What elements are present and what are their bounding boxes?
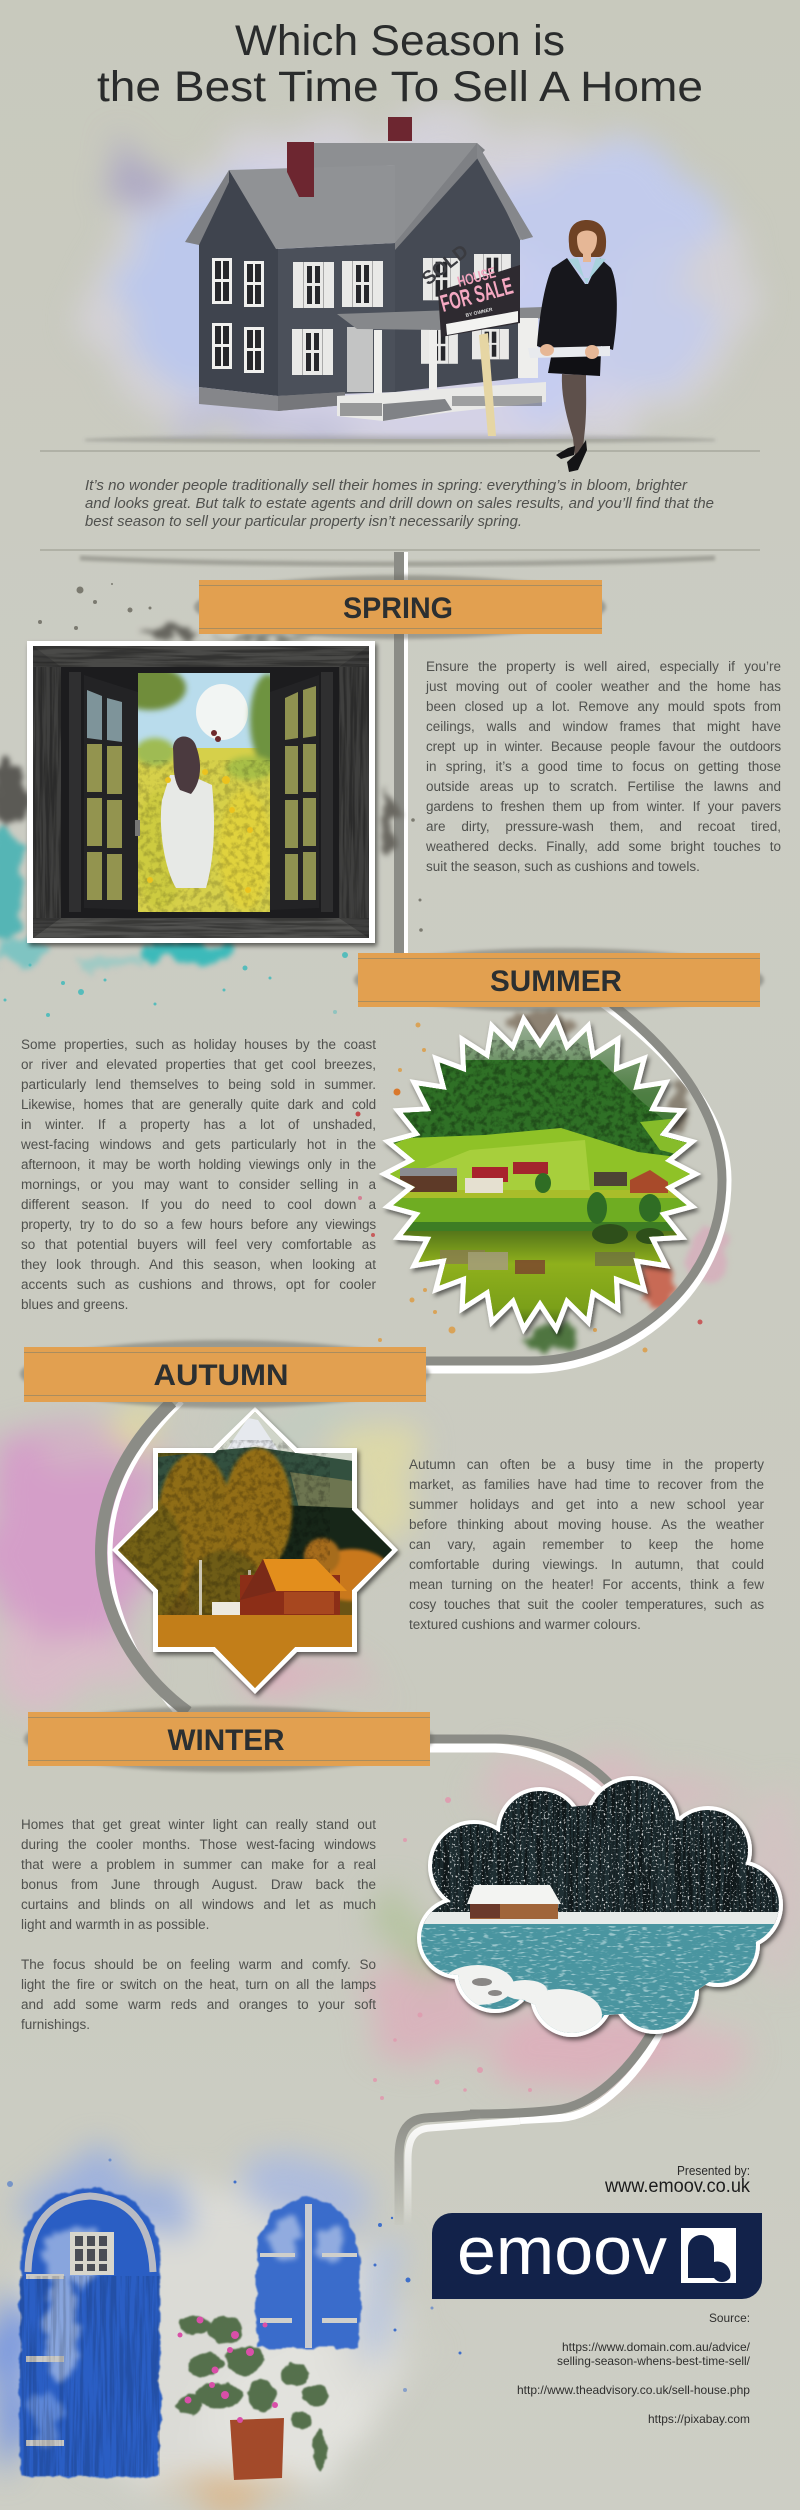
intro paragraph: [85, 478, 714, 530]
jacket: [537, 258, 617, 357]
lake reflection: [403, 1231, 677, 1324]
winter pink speckles: [373, 1797, 532, 2100]
winter banner: WINTER: [168, 1724, 285, 1757]
summer text block: in winter. If a property has a lot of unshaded,: [21, 1117, 376, 1132]
right wall: [395, 150, 520, 392]
front chimney: [287, 142, 314, 197]
front wall: [278, 243, 395, 396]
sources: http://www.theadvisory.co.uk/sell-house.php: [517, 2383, 750, 2397]
right blue window: [256, 2198, 359, 2348]
spring banner: SPRING: [343, 592, 453, 625]
intro paragraph: and looks great. But talk to estate agents and drill down on sales results, and you’ll find that the: [85, 496, 714, 512]
valley trees: [535, 1173, 661, 1224]
right roof edge: [395, 143, 485, 250]
summer text block: [21, 1037, 376, 1312]
valley scene: [390, 1024, 690, 1324]
autumn text block: summer holidays and get into a new school year: [409, 1497, 764, 1512]
summer text block: so that potential buyers will feel very comfortable as: [21, 1237, 376, 1252]
spring text block: gardens to freshen them up from winter. If your pavers: [426, 799, 781, 814]
back roof: [295, 143, 533, 243]
winter picture: snowy cabin cloud: [415, 1775, 785, 2041]
autumn banner: AUTUMN: [154, 1359, 288, 1392]
summer text block: Some properties, such as holiday houses by the coast: [21, 1037, 376, 1052]
for sale sign board: BY OWNER: [465, 307, 494, 319]
watercolour wash behind house: [80, 115, 750, 485]
door: [347, 327, 373, 392]
illustration: estate agent woman: [528, 220, 617, 472]
logo door icon: [681, 2228, 736, 2283]
cloud white border: [417, 1776, 783, 2037]
spring banner: [194, 575, 606, 639]
autumn cabin: [240, 1559, 347, 1617]
porch deck: [337, 382, 546, 421]
connector: summer arc: [426, 1003, 727, 1369]
connector: winter tail to footer: [399, 2114, 520, 2225]
autumn text block: textured cushions and warmer colours.: [409, 1617, 641, 1632]
front roof plane: [229, 165, 395, 249]
for sale sign board: HOUSE: [456, 264, 498, 291]
winter text block: light the fire or switch on the heat, turn on all the lamps: [21, 1977, 376, 1992]
winter text block: bonus from June through August. Draw back the: [21, 1877, 376, 1892]
orange speckles: [356, 1022, 702, 1352]
spring speckles: [38, 583, 423, 932]
summer picture: starburst green valley: [380, 1010, 700, 1341]
shoes: [556, 440, 587, 472]
sources: [517, 2311, 751, 2426]
winter text block: that were a problem in summer can make for a real: [21, 1857, 376, 1872]
spring teal wash: [0, 830, 238, 969]
spring text block: weathered decks. Finally, add some bright touches to: [426, 839, 781, 854]
autumn text block: before thinking about moving house. As the weather: [409, 1517, 764, 1532]
sold rider: SOLD: [418, 241, 473, 290]
winter text block: The focus should be on feeling warm and comfy. So: [21, 1957, 376, 1972]
presented by: [604, 2163, 750, 2197]
foundation: [199, 387, 345, 411]
for sale sign board: FOR SALE: [438, 273, 516, 318]
summer text block: or river and elevated properties that get cool breezes,: [21, 1057, 376, 1072]
snowy rocks: [448, 1965, 602, 2033]
bougainvillea plant: [178, 2316, 329, 2470]
summer text block: particularly lend themselves to being sold in summer.: [21, 1077, 376, 1092]
divider lines: [40, 451, 760, 550]
forest hill: [403, 1024, 687, 1156]
porch columns: [374, 318, 538, 394]
spring text block: crept up in winter. Because people favour the outdoors: [426, 739, 781, 754]
connector: winter arc: [430, 1739, 660, 2120]
painting wash: [0, 2158, 462, 2506]
spring text block: [426, 659, 781, 874]
porch steps: [383, 399, 452, 421]
autumn scene: [118, 1412, 392, 1688]
left roof edge: [185, 170, 229, 245]
presented by: Presented by:: [677, 2163, 750, 2178]
blouse collar: [568, 258, 606, 284]
summer text block: Likewise, homes that are generally quite dark and cold: [21, 1097, 376, 1112]
sources: https://www.domain.com.au/advice/: [562, 2340, 751, 2354]
spring text block: outside areas up to scratch. Fertilise the lawns and: [426, 779, 781, 794]
sources: Source:: [709, 2311, 750, 2325]
summer text block: different season. If you do need to cool down a: [21, 1197, 376, 1212]
autumn text block: mean turning on the heater! For accents, think a few: [409, 1577, 764, 1592]
spring text block: just moving out of cooler weather and the home has: [426, 679, 781, 694]
summer text block: mornings, or you may want to consider selling in a: [21, 1177, 376, 1192]
winter text block: furnishings.: [21, 2017, 90, 2032]
autumn text block: comfortable during viewings. In autumn, that could: [409, 1557, 764, 1572]
windows left wall: [212, 258, 264, 373]
summer banner: [354, 948, 764, 1012]
autumn text block: can vary, again remember to keep the home: [409, 1537, 764, 1552]
blue speckles: [7, 2158, 462, 2392]
autumn field: [158, 1615, 352, 1688]
summer text block: accents such as cushions and throws, opt for cooler: [21, 1277, 376, 1292]
valley houses: [400, 1162, 668, 1193]
meadow scene through window: [138, 673, 270, 912]
face and neck: [577, 230, 597, 262]
winter banner: [24, 1706, 434, 1772]
spring text block: ceilings, walls and window frames that might have: [426, 719, 781, 734]
footer painting: blue doors and bougainvillea: [0, 2158, 462, 2506]
winter text block: [21, 1817, 376, 2032]
connector: vertical spring line: [394, 552, 408, 954]
spring grey ink: [0, 629, 395, 857]
title: [97, 17, 703, 111]
winter text block: curtains and blinds on all windows and let as much: [21, 1897, 376, 1912]
intro paragraph: It’s no wonder people traditionally sell their homes in spring: everything’s in bloom, brighter: [85, 478, 688, 494]
summer text block: they look through. And this season, when looking at: [21, 1257, 376, 1272]
terracotta pot: [230, 2418, 284, 2480]
winter scene: [415, 1775, 785, 2041]
hair: [569, 220, 606, 257]
skirt: [548, 352, 601, 376]
summer text block: afternoon, it may be worth holding viewings only in the: [21, 1157, 376, 1172]
winter text block: light and warmth in as possible.: [21, 1917, 209, 1932]
spring text block: Ensure the property is well aired, especially if you’re: [426, 659, 781, 674]
sources: selling-season-whens-best-time-sell/: [557, 2354, 751, 2368]
right shutter: [270, 675, 319, 910]
winter text block: and add some warm reds and oranges to your soft: [21, 1997, 376, 2012]
teal speckles: [4, 952, 348, 1017]
spring text block: in spring, it’s a good time to focus on getting those: [426, 759, 781, 774]
presented by: www.emoov.co.uk: [604, 2176, 750, 2197]
legs: [562, 374, 586, 458]
autumn picture: cabin in star frame: [100, 1400, 410, 1700]
summer banner: SUMMER: [490, 965, 622, 998]
hands: [540, 344, 599, 359]
summer splatter: [356, 1011, 728, 1352]
windows front wall: [292, 261, 383, 375]
autumn banner: [20, 1340, 430, 1408]
title: the Best Time To Sell A Home: [97, 63, 703, 111]
autumn text block: cosy touches that suit the cooler temperatures, such as: [409, 1597, 764, 1612]
rolled plans: [528, 346, 610, 358]
summer text block: property, try to do so a few hours before any viewings: [21, 1217, 376, 1232]
for sale sign board: [438, 264, 520, 337]
emoov logo: emoov: [457, 2213, 667, 2289]
autumn text block: market, as families have had time to recover from the: [409, 1477, 764, 1492]
porch lattice: [340, 396, 542, 416]
winter pink wash: [370, 1766, 800, 2100]
starburst white border: [382, 1017, 698, 1331]
summer text block: blues and greens.: [21, 1297, 128, 1312]
sign post: [479, 333, 496, 436]
connector: top shadow under divider: [80, 558, 715, 564]
title: Which Season is: [235, 17, 565, 65]
left gable wall: [199, 170, 278, 396]
star white border: [112, 1407, 398, 1694]
left shutter: [84, 675, 140, 910]
porch roof: [337, 307, 543, 330]
wooden window frame: [33, 646, 369, 938]
winter cabin: [467, 1885, 561, 1919]
white picture frame: [27, 641, 375, 943]
illustration: grey house for sale: [185, 117, 546, 436]
emoov logo: [432, 2213, 762, 2299]
summer pink wash: [504, 1011, 728, 1350]
wash bottom shadow: [85, 432, 715, 443]
summer text block: west-facing windows and gets particularly hot in the: [21, 1137, 376, 1152]
winter text block: during the cooler months. Those west-facing windows: [21, 1837, 376, 1852]
autumn text block: [409, 1457, 764, 1632]
sources: https://pixabay.com: [648, 2412, 750, 2426]
spring text block: are dirty, pressure-wash them, and recoat tired,: [426, 819, 781, 834]
spring picture: window on flower meadow: [27, 641, 375, 943]
autumn text block: Autumn can often be a busy time in the property: [409, 1457, 764, 1472]
left blue door: [20, 2188, 160, 2476]
house chimneys: [388, 117, 412, 141]
windows right wall: [421, 254, 511, 364]
spring ink and teal splatter: [0, 583, 423, 1017]
autumn watercolour wash: [0, 1406, 411, 1697]
spring text block: suit the season, such as cushions and towels.: [426, 859, 700, 874]
spring text block: been closed up a lot. Remove any mould spots from: [426, 699, 781, 714]
winter text block: Homes that get great winter light can really stand out: [21, 1817, 376, 1832]
intro paragraph: best season to sell your particular property isn’t necessarily spring.: [85, 514, 522, 530]
connector: autumn arc: [101, 1402, 188, 1712]
bright fields: [380, 1128, 700, 1195]
